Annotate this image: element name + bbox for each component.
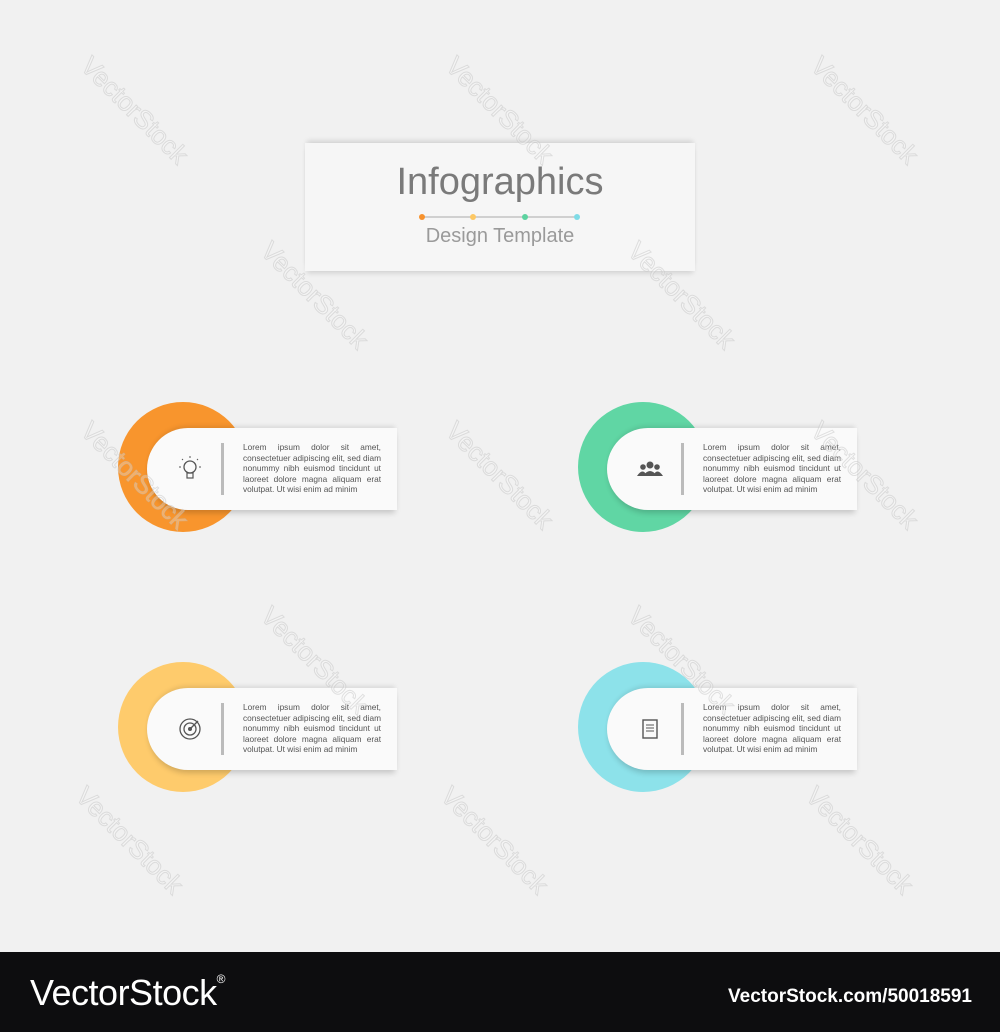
footer logo: VectorStock® [30, 972, 225, 1013]
subtitle: Design Template [426, 225, 574, 247]
text: VectorStock [70, 780, 189, 900]
text: VectorStock [75, 50, 194, 170]
item 3: yellow [118, 662, 398, 792]
text: VectorStock [800, 780, 919, 900]
text: VectorStock [255, 600, 374, 720]
watermarks [70, 50, 924, 900]
text: Lorem ipsum dolor sit amet, consectetuer adipiscing elit, sed diam nonummy nibh euismod tincidunt ut laoreet dolore magna aliquam erat volutpat. Ut wisi enim ad minim [703, 442, 841, 494]
icon: book [642, 719, 658, 739]
footer url: VectorStock.com/50018591 [728, 986, 972, 1007]
text: VectorStock [622, 600, 741, 720]
text: Lorem ipsum dolor sit amet, consectetuer adipiscing elit, sed diam nonummy nibh euismod tincidunt ut laoreet dolore magna aliquam erat volutpat. Ut wisi enim ad minim [243, 702, 381, 754]
icon: target [179, 718, 201, 740]
text: VectorStock [75, 415, 194, 535]
item 2: green [578, 402, 858, 532]
text: VectorStock [805, 415, 924, 535]
text: VectorStock [440, 415, 559, 535]
icon: bulb [179, 456, 201, 479]
icon: people [637, 462, 663, 476]
item 4: cyan [578, 662, 858, 792]
dots line [419, 214, 580, 220]
title: Infographics [396, 161, 604, 203]
item 1: orange [118, 402, 398, 532]
text: Lorem ipsum dolor sit amet, consectetuer adipiscing elit, sed diam nonummy nibh euismod tincidunt ut laoreet dolore magna aliquam erat volutpat. Ut wisi enim ad minim [243, 442, 381, 494]
text: Lorem ipsum dolor sit amet, consectetuer adipiscing elit, sed diam nonummy nibh euismod tincidunt ut laoreet dolore magna aliquam erat volutpat. Ut wisi enim ad minim [703, 702, 841, 754]
text: VectorStock [255, 235, 374, 355]
text: VectorStock [440, 50, 559, 170]
footer bar [0, 952, 1000, 1032]
title card [305, 143, 695, 271]
text: VectorStock [435, 780, 554, 900]
text: VectorStock [622, 235, 741, 355]
text: VectorStock [805, 50, 924, 170]
